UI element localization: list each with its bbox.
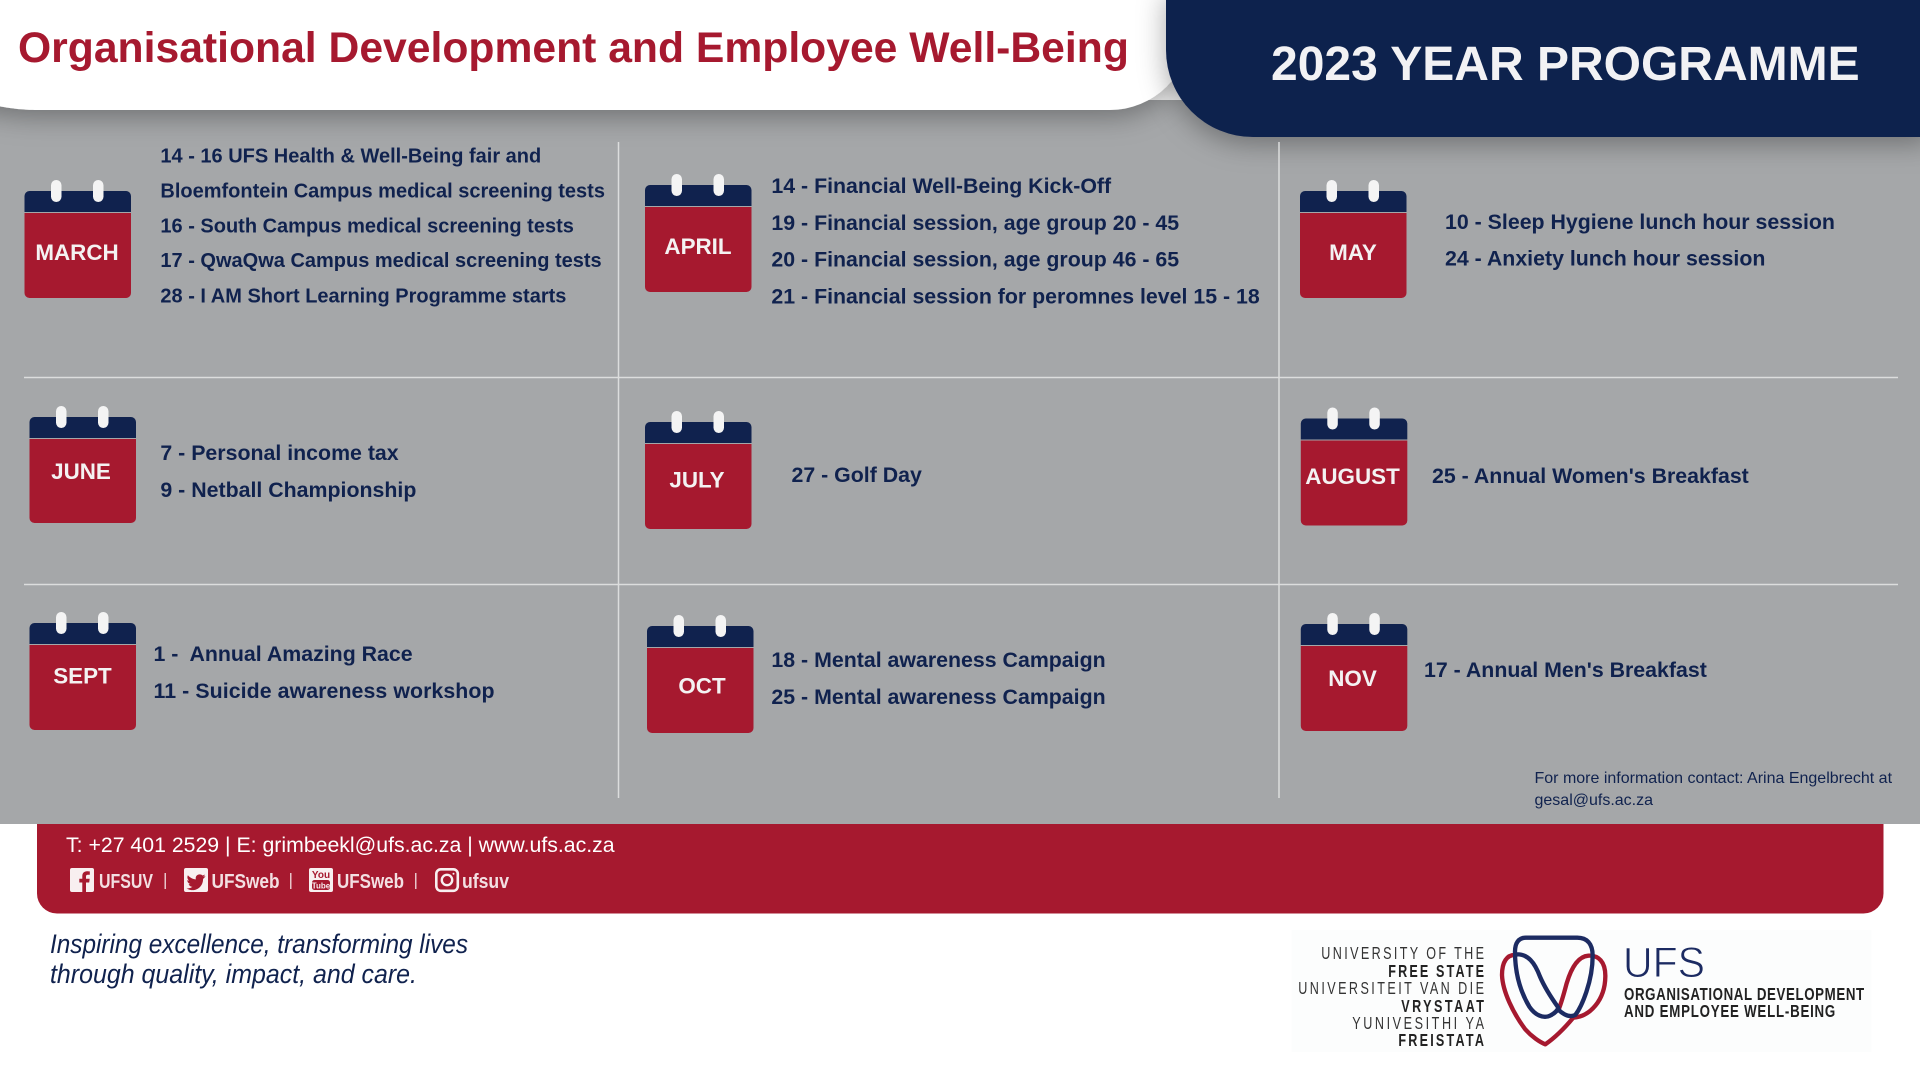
September events: 1 - Annual Amazing Race <box>154 642 413 666</box>
panel: June: JUNE <box>51 459 111 484</box>
logo: university names: UNIVERSITY OF THE <box>1321 944 1484 964</box>
panel: August: AUGUST <box>1305 464 1400 489</box>
June events <box>160 441 416 502</box>
panel: August <box>1301 408 1749 526</box>
panel: September <box>30 612 494 730</box>
March events: Bloemfontein Campus medical screening tests <box>160 180 605 202</box>
March events: 28 - I AM Short Learning Programme starts <box>160 286 566 308</box>
panel: March: MARCH <box>35 240 119 265</box>
panel: April: APRIL <box>664 234 732 259</box>
icon: May calendar <box>1300 180 1406 298</box>
icon: youtube: You <box>312 870 330 881</box>
April events: 14 - Financial Well-Being Kick-Off <box>771 174 1112 198</box>
April events: 20 - Financial session, age group 46 - 65 <box>771 248 1179 272</box>
icon: August calendar <box>1301 408 1407 526</box>
March events: 17 - QwaQwa Campus medical screening tests <box>160 250 602 272</box>
June events: 7 - Personal income tax <box>160 441 399 465</box>
May events <box>1445 210 1835 270</box>
panel: May <box>1300 180 1835 298</box>
logo: university names: FREISTATA <box>1398 1031 1484 1051</box>
logo: university names <box>1298 944 1485 1051</box>
panel: July: JULY <box>669 468 725 492</box>
logo: department name: AND EMPLOYEE WELL-BEING <box>1624 1002 1835 1022</box>
tagline: through quality, impact, and care. <box>50 959 417 989</box>
August events: 25 - Annual Women's Breakfast <box>1432 464 1749 488</box>
social media row: UFSweb <box>337 871 404 893</box>
panel: September: SEPT <box>53 664 112 688</box>
tagline: Inspiring excellence, transforming lives <box>50 929 468 959</box>
panel: November: NOV <box>1328 666 1377 691</box>
panel: October: OCT <box>678 674 726 698</box>
icon: October calendar <box>647 615 754 733</box>
footer contact line: T: +27 401 2529 | E: grimbeekl@ufs.ac.za | www.ufs.ac.za <box>66 833 615 857</box>
contact note: For more information contact: Arina Engelbrecht at <box>1534 770 1893 787</box>
logo: university names: YUNIVESITHI YA <box>1352 1014 1485 1034</box>
July events: 27 - Golf Day <box>792 463 922 487</box>
icon: youtube: Tube <box>312 882 331 890</box>
tagline <box>50 929 468 989</box>
March events <box>160 146 605 308</box>
grey programme panel <box>0 100 1920 824</box>
panel: April <box>645 174 1260 308</box>
year programme heading: 2023 YEAR PROGRAMME <box>1271 38 1860 91</box>
icon: March calendar <box>24 180 131 298</box>
contact note: gesal@ufs.ac.za <box>1534 792 1653 809</box>
April events <box>771 174 1260 308</box>
icon: September calendar <box>30 612 136 730</box>
March events: 16 - South Campus medical screening tests <box>160 216 574 238</box>
panel: March <box>24 146 605 308</box>
April events: 21 - Financial session for peromnes level 15 - 18 <box>771 284 1260 308</box>
icon: twitter <box>184 868 208 892</box>
logo: department name <box>1624 985 1865 1022</box>
October events: 18 - Mental awareness Campaign <box>771 648 1106 672</box>
icon: instagram <box>436 869 458 891</box>
panel: July <box>645 411 922 529</box>
panel: November <box>1301 613 1707 731</box>
icon: June calendar <box>30 406 136 523</box>
May events: 10 - Sleep Hygiene lunch hour session <box>1445 210 1835 234</box>
logo: university names: UNIVERSITEIT VAN DIE <box>1298 979 1484 999</box>
header: navy tab <box>1166 0 1920 137</box>
icon: November calendar <box>1301 613 1407 731</box>
June events: 9 - Netball Championship <box>160 478 416 502</box>
contact note <box>1534 770 1893 809</box>
header: white title tab <box>0 0 1190 110</box>
logo: university names: VRYSTAAT <box>1401 997 1485 1017</box>
icon: youtube <box>309 868 333 892</box>
icon: July calendar <box>645 411 752 529</box>
October events <box>771 648 1106 709</box>
title: Organisational Development and Employee Well-Being <box>18 24 1129 72</box>
social media row: UFSweb <box>212 871 280 893</box>
November events: 17 - Annual Men's Breakfast <box>1424 658 1707 682</box>
logo: university names: FREE STATE <box>1388 962 1484 982</box>
logo: heart knot symbol <box>1502 938 1605 1044</box>
logo: UFS organisational development <box>1292 930 1872 1052</box>
April events: 19 - Financial session, age group 20 - 45 <box>771 211 1179 235</box>
icon: April calendar <box>645 174 752 292</box>
panel: October <box>647 615 1106 733</box>
social media row <box>70 868 510 893</box>
grid lines <box>24 142 1898 798</box>
panel: June <box>30 406 416 523</box>
logo: department name: ORGANISATIONAL DEVELOPMENT <box>1624 985 1865 1005</box>
September events <box>154 642 494 703</box>
panel: May: MAY <box>1329 240 1377 265</box>
social media row: UFSUV <box>99 871 154 893</box>
icon: facebook <box>70 868 94 892</box>
September events: 11 - Suicide awareness workshop <box>154 679 494 703</box>
social media row: ufsuv <box>462 871 510 893</box>
October events: 25 - Mental awareness Campaign <box>771 685 1106 709</box>
May events: 24 - Anxiety lunch hour session <box>1445 246 1765 270</box>
March events: 14 - 16 UFS Health & Well-Being fair and <box>160 146 541 168</box>
footer band <box>37 800 1884 914</box>
logo: UFS wordmark: UFS <box>1623 939 1705 987</box>
